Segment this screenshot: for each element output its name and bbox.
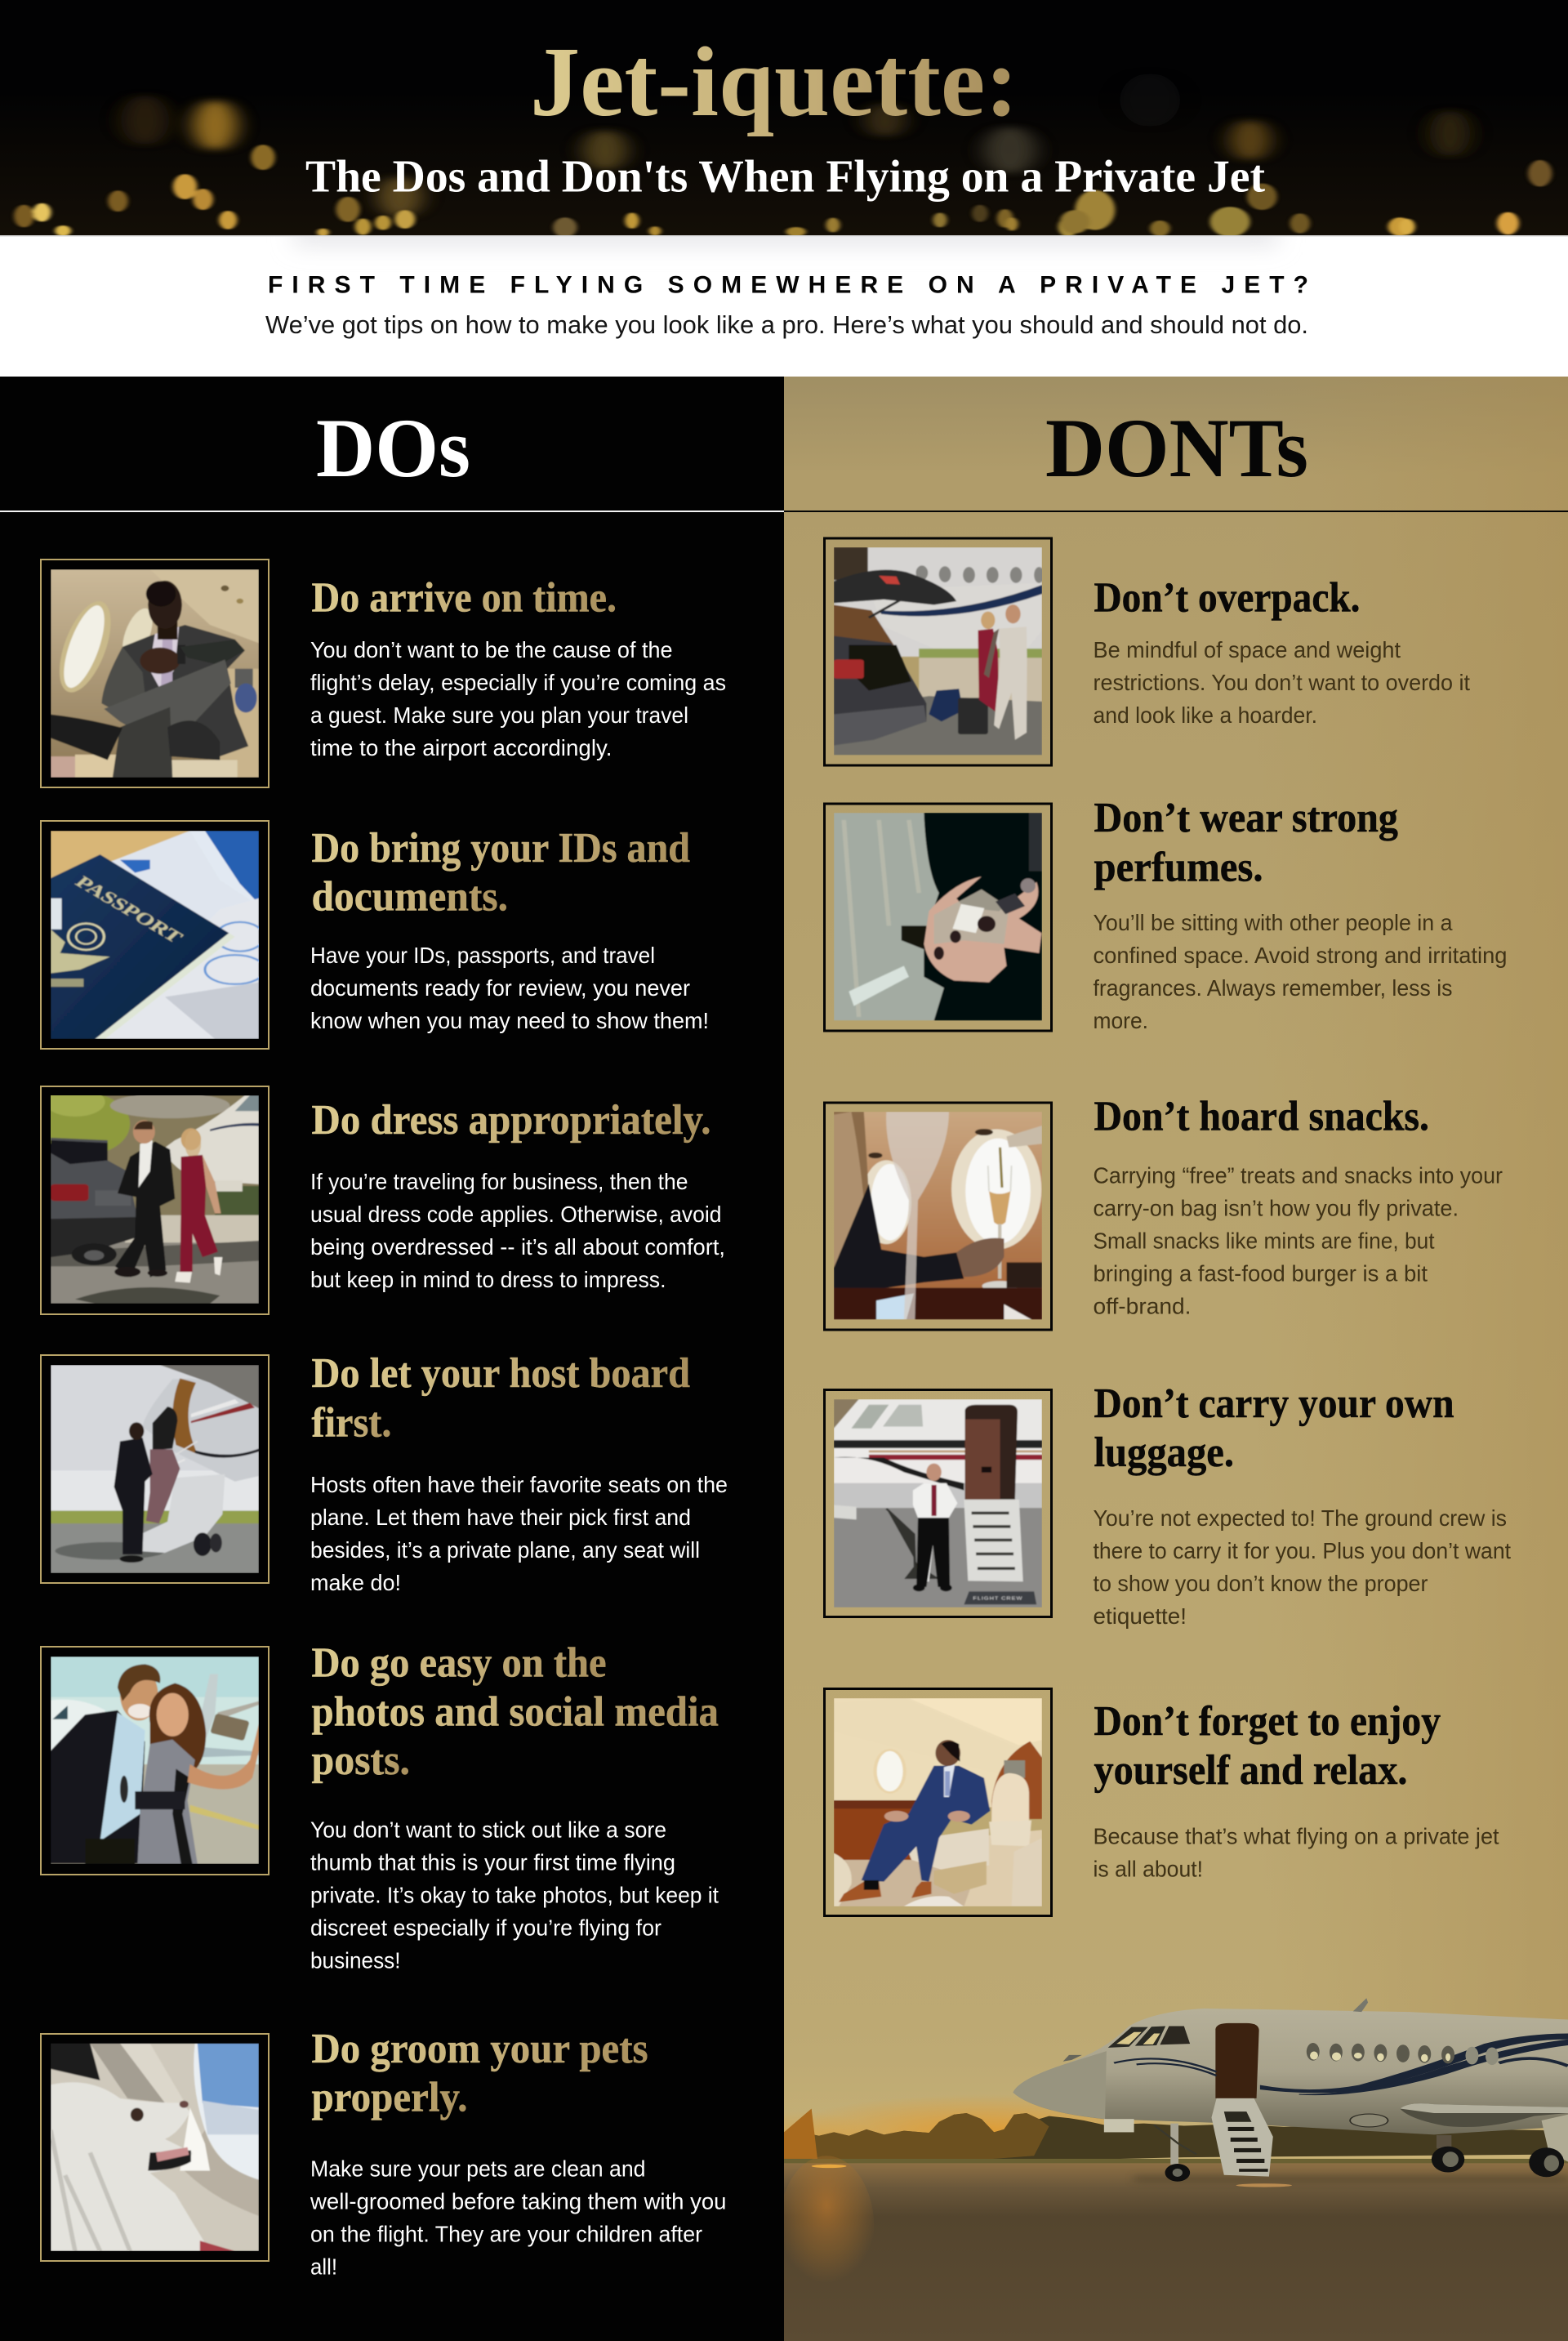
photo frame: pilot beside airstair: FLIGHT CREW [973,1596,1023,1601]
heading: Do dress appropriately. [312,1097,710,1144]
body text: flight’s delay, especially if you’re coming as [310,670,726,695]
body text: If you’re traveling for business, then the [310,1169,688,1194]
heading: luggage. [1094,1429,1234,1476]
body text: off-brand. [1093,1294,1191,1318]
photo frame: man relaxing in cabin [825,1689,1052,1916]
body text: restrictions. You don’t want to overdo it [1093,670,1470,695]
body text: to show you don’t know the proper [1093,1571,1428,1596]
photo frame: pilot beside airstair [825,1390,1052,1617]
body text: Hosts often have their favorite seats on the [310,1472,728,1497]
body text: You’ll be sitting with other people in a [1093,910,1453,935]
body text: You’re not expected to! The ground crew is [1093,1505,1507,1531]
item: Do let your host board first [41,1350,728,1595]
item: Don't carry your own luggage [825,1380,1511,1629]
body text: You don’t want to stick out like a sore [310,1817,666,1843]
body text: bringing a fast-food burger is a bit [1093,1261,1428,1286]
item: Do dress appropriately [40,1086,725,1314]
heading: Do go easy on the [312,1640,606,1686]
panel: header banner with bokeh background [0,0,1568,238]
panel: intro strip [0,225,1568,377]
heading: Don’t forget to enjoy [1094,1698,1441,1745]
body text [1093,910,1508,1033]
photo frame: champagne glasses [825,1103,1052,1330]
heading: Don’t wear strong [1094,795,1398,841]
heading: first. [312,1400,392,1446]
air stairs [1211,2098,1273,2177]
heading [1094,795,1398,890]
subtitle: The Dos and Don'ts When Flying on a Private Jet [305,152,1265,203]
body text [310,943,709,1033]
heading: Do bring your IDs and [312,825,690,872]
body text [1093,1505,1511,1629]
body text: carry-on bag isn’t how you fly private. [1093,1196,1459,1220]
intro heading: FIRST TIME FLYING SOMEWHERE ON A PRIVATE JET? [268,271,1308,299]
heading: posts. [312,1737,410,1784]
body text: on the flight. They are your children after [310,2222,702,2246]
heading: Don’t hoard snacks. [1094,1093,1429,1140]
panel: DONTs column background [784,377,1568,2341]
body text: and look like a hoarder. [1093,702,1317,728]
heading [312,825,690,920]
photo frame: perfume bottle in hand [825,804,1052,1031]
jet body [1013,2009,1568,2134]
photo frame: white dog at window [41,2034,269,2261]
heading: Don’t overpack. [1094,575,1361,621]
heading: Do let your host board [312,1350,690,1397]
body text: thumb that this is your first time flying [310,1849,675,1875]
body text: Small snacks like mints are fine, but [1093,1228,1435,1253]
body text: Because that’s what flying on a private jet [1093,1823,1499,1849]
body text: know when you may need to show them! [310,1008,709,1033]
body text: a guest. Make sure you plan your travel [310,702,688,728]
photo: private jet at sunset [784,1998,1568,2341]
body text: confined space. Avoid strong and irritating [1093,943,1508,968]
body text: usual dress code applies. Otherwise, avoid [310,1202,722,1227]
photo frame: selfie couple [41,1647,269,1875]
heading: Don’t carry your own [1094,1380,1454,1427]
body text: Carrying “free” treats and snacks into your [1093,1163,1503,1188]
body text: make do! [310,1570,401,1595]
landing gear [1154,2124,1564,2182]
heading: photos and social media [312,1689,719,1735]
item: Do go easy on photos [41,1640,719,1973]
heading [312,1350,690,1446]
heading: DOs: DOs [316,402,470,495]
photo frame: couple by car [40,1086,269,1314]
photo frame: women with luggage [825,538,1052,765]
heading: yourself and relax. [1094,1747,1408,1794]
intro text: We’ve got tips on how to make you look like a pro. Here’s what you should and should not do. [265,310,1308,339]
body text: there to carry it for you. Plus you don’t want [1093,1538,1511,1563]
body text [1093,1163,1503,1318]
body text: being overdressed -- it’s all about comfort, [310,1234,725,1260]
photo frame: passport [41,821,269,1049]
item: Don't forget to enjoy [825,1689,1499,1916]
item: Do arrive on time [41,560,726,787]
heading [1094,1380,1454,1476]
body text: business! [310,1947,400,1973]
body text: discreet especially if you’re flying for [310,1915,662,1941]
photo frame: man checking watch [41,560,269,787]
photo frame: passport: PASSPORT [70,873,187,947]
body text [1093,637,1470,728]
body text [310,2156,727,2279]
body text: Be mindful of space and weight [1093,637,1401,662]
item: Don't hoard snacks [825,1093,1503,1330]
heading [312,2026,648,2120]
body text [1093,1823,1499,1882]
heading: Do arrive on time. [312,575,617,621]
heading [1094,1698,1441,1794]
body text: well-groomed before taking them with you [310,2189,727,2214]
treeline [784,2113,1568,2163]
body text: documents ready for review, you never [310,975,690,1001]
item: Do groom your pets [41,2026,727,2279]
heading: documents. [312,874,508,920]
body text: but keep in mind to dress to impress. [310,1267,666,1292]
heading: Do groom your pets [312,2026,648,2072]
body text: besides, it’s a private plane, any seat will [310,1537,700,1563]
body text: is all about! [1093,1856,1203,1882]
item: Do bring your IDs [41,821,709,1049]
body text: time to the airport accordingly. [310,735,612,760]
panel: DOs column background [0,377,784,2341]
body text: Have your IDs, passports, and travel [310,943,655,968]
photo frame: boarding the jet [41,1355,269,1583]
body text: Make sure your pets are clean and [310,2156,645,2181]
heading [312,1640,719,1784]
item: Don't wear strong perfumes [825,795,1508,1033]
body text: more. [1093,1008,1148,1033]
heading: perfumes. [1094,845,1263,890]
runway [784,2163,1568,2341]
title: Jet-iquette: [530,27,1018,137]
body text: You don’t want to be the cause of the [310,637,673,662]
body text [310,637,726,760]
body text: fragrances. Always remember, less is [1093,975,1452,1001]
body text: etiquette! [1093,1603,1187,1629]
body text: plane. Let them have their pick first and [310,1505,691,1530]
body text [310,1817,719,1973]
body text [310,1472,728,1595]
body text: private. It’s okay to take photos, but keep it [310,1882,719,1908]
body text: all! [310,2254,337,2279]
body text [310,1169,725,1292]
heading: DONTs: DONTs [1045,402,1308,495]
heading: properly. [312,2075,467,2120]
item: Don't overpack [825,538,1470,765]
